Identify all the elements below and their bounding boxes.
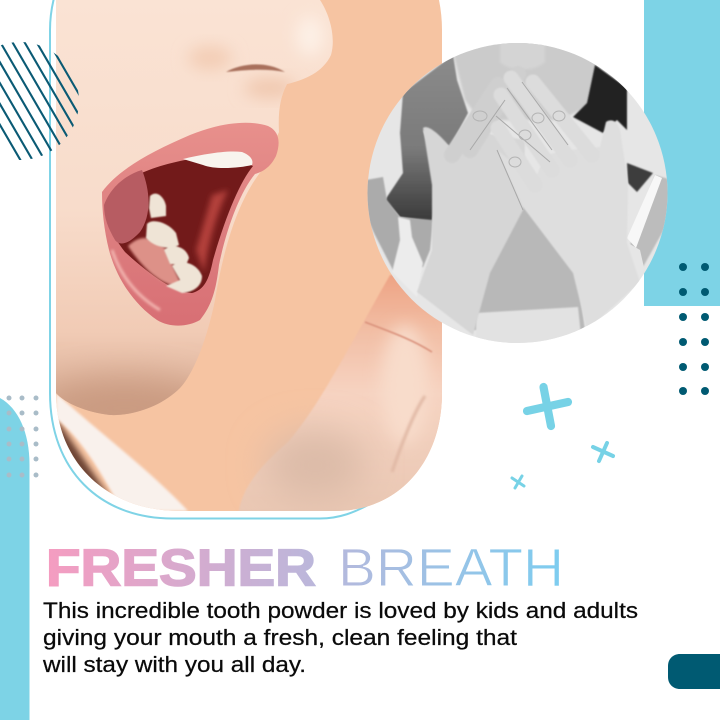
nostril (226, 64, 285, 72)
left hand and fingers (417, 110, 525, 334)
lower teeth (146, 194, 202, 293)
panel: right blue block (644, 0, 720, 306)
upper teeth (183, 152, 253, 168)
body text: This incredible tooth powder is loved by kids and adults (43, 598, 638, 623)
body text: giving your mouth a fresh, clean feeling that (43, 625, 517, 650)
body text (42, 598, 638, 677)
face (56, 0, 333, 415)
icon: medium plus (593, 443, 613, 461)
dots: grey grid bottom-left (6, 396, 38, 478)
title: FRESHER (46, 540, 316, 598)
right hair lower lock (627, 163, 653, 192)
title (46, 539, 564, 598)
lower lip highlight (112, 250, 160, 310)
mouth interior (105, 159, 253, 293)
photo: open mouth profile (35, 0, 450, 520)
circle base (368, 56, 668, 337)
chest (470, 205, 585, 330)
peach backdrop (56, 0, 442, 511)
finger lines (470, 82, 568, 210)
photo: hands covering mouth in grayscale circle (360, 40, 675, 350)
icon: small plus (512, 476, 524, 488)
face and neck (450, 40, 600, 120)
right hand and fingers (497, 78, 640, 330)
lace bottom (476, 306, 581, 340)
title: BREATH (338, 539, 564, 598)
right strap (627, 175, 662, 248)
gums (128, 238, 182, 286)
tongue (104, 170, 148, 243)
stripes circle (0, 42, 79, 160)
teal pill tab (668, 654, 720, 689)
dots: teal grid right (679, 263, 709, 395)
left hair (385, 55, 468, 222)
outline around photo (50, 0, 370, 518)
lips (102, 123, 279, 326)
nose shadow (502, 43, 544, 68)
finger joints (473, 111, 565, 167)
right hair (573, 65, 627, 133)
right lace (630, 244, 645, 272)
collar and neck shadow (56, 393, 188, 520)
face shading (35, 16, 324, 438)
body text: will stay with you all day. (42, 652, 306, 677)
inner cheek glow (196, 190, 228, 272)
right shoulder (630, 174, 668, 266)
left shoulder (366, 177, 433, 270)
icon: large plus (527, 387, 568, 426)
hand (238, 275, 450, 520)
left lace (392, 216, 424, 271)
panel: left blue rounded strip (0, 398, 30, 720)
